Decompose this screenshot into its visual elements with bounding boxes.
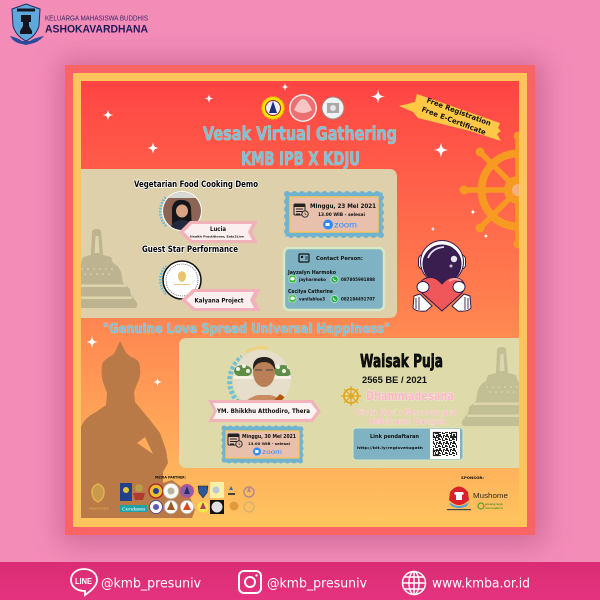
year: 2565 BE / 2021 xyxy=(362,375,428,386)
speaker topic: dhammadesana: Dhammadesana xyxy=(366,389,454,403)
icon: small gold dharma wheel xyxy=(341,386,361,406)
icon: contact card xyxy=(299,254,309,262)
organiser logos xyxy=(262,94,344,122)
icon: LINE xyxy=(71,569,97,595)
subtitle: KMB IPB X KDJU xyxy=(241,149,360,170)
sponsors xyxy=(447,475,508,510)
name ribbon: monk xyxy=(208,400,321,422)
name ribbon: Kalyana Project: Kalyana Project xyxy=(194,298,244,304)
speaker photo: monk xyxy=(227,346,291,400)
speaker photo: Lucia xyxy=(158,191,202,231)
icon: stupa right xyxy=(462,347,519,426)
banner: free registration tape: Free Registration xyxy=(425,96,492,128)
logo: red shirt shield xyxy=(447,486,471,510)
logo: bird crest xyxy=(133,484,145,500)
organisation logo: Ashokavardhana xyxy=(10,4,148,45)
contact person box: Jayzalyn Harmoko xyxy=(287,270,337,276)
registration link box xyxy=(353,428,463,460)
guest photo: Kalyana Project xyxy=(160,261,201,299)
icon: shield crest xyxy=(10,4,44,45)
contact person box: 087805991888 xyxy=(341,277,375,282)
contact person box xyxy=(284,248,384,310)
logo: Kalyana Project: Kalyana Project xyxy=(89,506,109,510)
poster frame xyxy=(65,65,535,535)
date box: 23 Mei 2021: 13.00 WIB - selesai xyxy=(318,212,365,218)
logo: green sponsor xyxy=(478,502,503,510)
illustration: buddha silhouette xyxy=(81,341,195,518)
quote: Genuine Love Spread Universal Happiness: "Genuine Love Spread Universal Happiness" xyxy=(103,321,390,337)
partner seals xyxy=(149,482,254,514)
contact person box: vanilablue3 xyxy=(299,296,325,302)
registration link box: Link pendaftaran xyxy=(370,434,420,440)
heading: sponsor: SPONSOR: xyxy=(461,475,484,480)
date box: 30 Mei 2021: 13.00 WIB - selesai xyxy=(248,441,290,446)
icon: Instagram xyxy=(239,571,261,593)
title xyxy=(203,124,397,170)
name ribbon: Lucia xyxy=(179,221,258,243)
icon: stupa left xyxy=(81,229,138,308)
talk title xyxy=(355,408,456,426)
website url: www.kmba.or.id xyxy=(432,576,530,592)
banner: free registration tape: Free E-Certificate xyxy=(420,105,487,137)
heading: guest star performance: Guest Star Performance xyxy=(142,245,238,255)
contact person box: jayharmoko xyxy=(298,277,326,282)
date box: 23 Mei 2021 xyxy=(287,194,381,235)
line handle: @kmb_presuniv xyxy=(101,576,201,592)
banner: free registration tape xyxy=(399,94,501,141)
logo: cendawa xyxy=(120,505,147,512)
logo: zoom: zoom xyxy=(262,449,282,456)
name ribbon: Lucia: Lucia xyxy=(210,226,226,233)
media partner logos xyxy=(89,476,254,514)
contact person box: Contact Person: xyxy=(316,256,363,262)
name ribbon: Kalyana Project xyxy=(181,289,261,311)
logo: zoom: zoom xyxy=(334,220,357,230)
contact person box: 082184451707 xyxy=(341,296,375,302)
instagram handle: @kmb_presuniv xyxy=(267,576,367,592)
footer band xyxy=(0,562,600,600)
date box: 30 Mei 2021 xyxy=(224,428,301,461)
decorative stars xyxy=(86,83,489,386)
logo: cendawa: Cendawa xyxy=(122,506,146,512)
logo: mushome: Mushome xyxy=(473,491,508,500)
logo: pink lotus seal xyxy=(289,94,317,122)
QR code xyxy=(430,429,460,459)
organisation name large: ASHOKAVARDHANA xyxy=(45,24,148,36)
name ribbon: Lucia: Health Practitioner, Eats2Live xyxy=(190,234,244,238)
panel: virtual gathering programme xyxy=(57,169,397,318)
panel: waisak puja xyxy=(179,338,542,468)
icon: LINE: LINE xyxy=(75,577,93,586)
poster drop shadow xyxy=(60,60,544,544)
heading: media partner: MEDIA PARTNER: xyxy=(155,476,187,480)
name ribbon: monk: YM. Bhikkhu Atthodiro, Thera xyxy=(216,408,310,415)
logo: green sponsor: sensation xyxy=(485,506,503,510)
registration link box: http://bit.ly/regisvetugath xyxy=(357,446,424,450)
date box: 23 Mei 2021: Minggu, 23 Mei 2021 xyxy=(310,204,376,210)
icon: dharma wheel xyxy=(460,132,519,248)
icon: globe xyxy=(402,572,426,594)
talk title: Keluhuran Bangsa xyxy=(369,417,445,426)
illustration: astronaut hugging heart xyxy=(413,240,471,311)
logo: blue badge xyxy=(120,483,132,501)
title: Vesak Virtual Gathering xyxy=(203,124,397,145)
logo: Kalyana Project xyxy=(89,484,109,510)
talk title: Cinta Kasih Membangun xyxy=(355,408,456,417)
logo: yellow KMB seal xyxy=(262,97,284,119)
date box: 30 Mei 2021: Minggu, 30 Mei 2021 xyxy=(242,434,296,440)
heading: cooking demo: Vegetarian Food Cooking Demo xyxy=(134,180,258,190)
contact person box: Cecilya Catherine xyxy=(288,289,334,295)
organisation name small: KELUARGA MAHASISWA BUDDHIS xyxy=(45,16,148,22)
logo: grey university seal xyxy=(322,97,344,119)
logo: green sponsor: pisang keju xyxy=(485,502,503,506)
heading: waisak puja: Waisak Puja xyxy=(360,351,443,372)
